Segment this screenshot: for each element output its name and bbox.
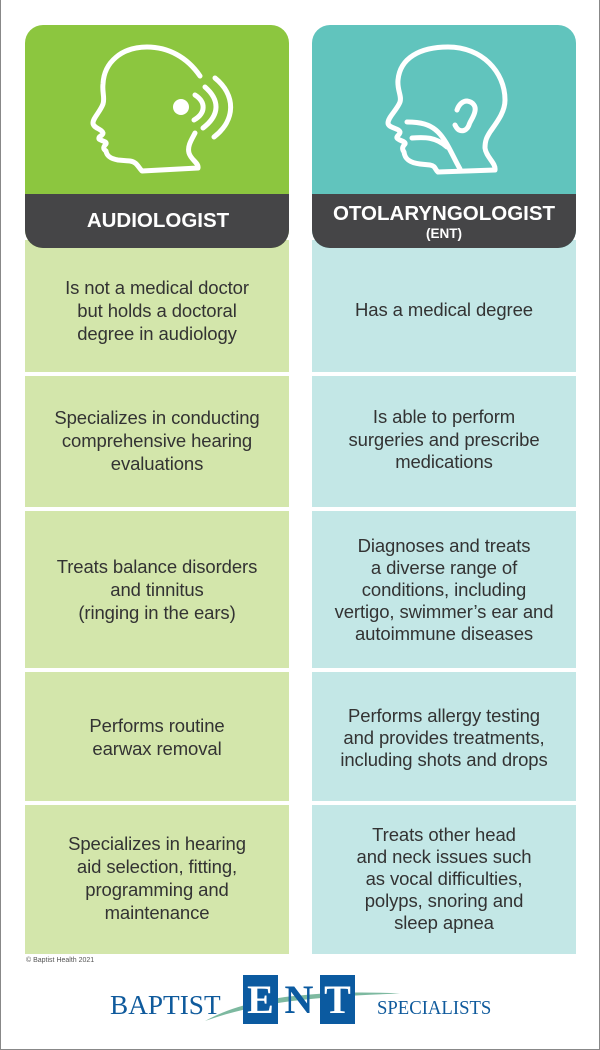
row 2: medications: [395, 451, 493, 472]
row 4: [25, 672, 289, 801]
logo letter box E: E: [247, 977, 274, 1022]
band: audiologist title: AUDIOLOGIST: [87, 209, 229, 232]
row 1: [25, 240, 289, 372]
row 3: Treats balance disorders: [57, 556, 257, 576]
row 4: Performs routine: [89, 714, 225, 736]
row 3: vertigo, swimmer’s ear and: [335, 601, 553, 622]
row 1: Has a medical degree: [355, 299, 533, 320]
row 4: [312, 672, 576, 801]
row 3: [312, 511, 576, 668]
row 2: Specializes in conducting: [54, 406, 260, 428]
row 3: conditions, including: [362, 579, 526, 600]
panel: audiologist column: [25, 25, 289, 954]
row 5: Treats other head: [372, 824, 516, 845]
band: audiologist title: [25, 194, 289, 248]
header: audiologist: [25, 25, 289, 248]
logo letter N: N: [285, 977, 313, 1022]
logo swoosh: [205, 992, 400, 1021]
row 5: and neck issues such: [357, 846, 531, 867]
row 4: Performs allergy testing: [348, 705, 540, 726]
row 3: (ringing in the ears): [78, 602, 236, 622]
row 5: [25, 805, 289, 954]
row 5: maintenance: [105, 902, 209, 922]
row 5: as vocal difficulties,: [366, 868, 522, 889]
row 5: programming and: [85, 878, 229, 900]
logo word: Specialists: SPECIALISTS: [377, 997, 491, 1019]
band: otolaryngologist title: OTOLARYNGOLOGIST: [333, 202, 555, 225]
row 2: [25, 376, 289, 507]
row 2: comprehensive hearing: [62, 430, 252, 450]
logo: Baptist ENT Specialists: [110, 975, 491, 1024]
row 5: [312, 805, 576, 954]
row 5: sleep apnea: [394, 912, 494, 933]
logo word: Baptist: BAPTIST: [110, 990, 221, 1020]
band: otolaryngologist title: (ENT): [426, 226, 462, 241]
row 3: Diagnoses and treats: [358, 535, 530, 556]
icon: head with sound waves: [90, 44, 234, 174]
row 1: degree in audiology: [77, 323, 237, 344]
logo letter box T: T: [324, 977, 351, 1022]
row 4: including shots and drops: [340, 749, 548, 770]
row 2: [312, 376, 576, 507]
row 5: aid selection, fitting,: [77, 856, 237, 876]
icon: head profile with throat and ear: [386, 44, 508, 174]
row 2: surgeries and prescribe: [348, 428, 540, 450]
copyright note: © Baptist Health 2021: [26, 957, 94, 964]
row 3: autoimmune diseases: [355, 623, 533, 644]
band: otolaryngologist title: [312, 194, 576, 248]
row 2: Is able to perform: [373, 406, 515, 427]
row 4: and provides treatments,: [343, 727, 545, 748]
row 1: but holds a doctoral: [77, 300, 237, 321]
row 3: and tinnitus: [110, 578, 204, 600]
row 3: [25, 511, 289, 668]
row 3: a diverse range of: [371, 557, 517, 578]
row 1: [312, 240, 576, 372]
row 5: Specializes in hearing: [68, 832, 246, 854]
row 5: polyps, snoring and: [365, 890, 523, 911]
row 1: Is not a medical doctor: [65, 277, 249, 298]
row 4: earwax removal: [92, 738, 222, 758]
row 2: evaluations: [111, 452, 203, 474]
header: otolaryngologist: [312, 25, 576, 248]
